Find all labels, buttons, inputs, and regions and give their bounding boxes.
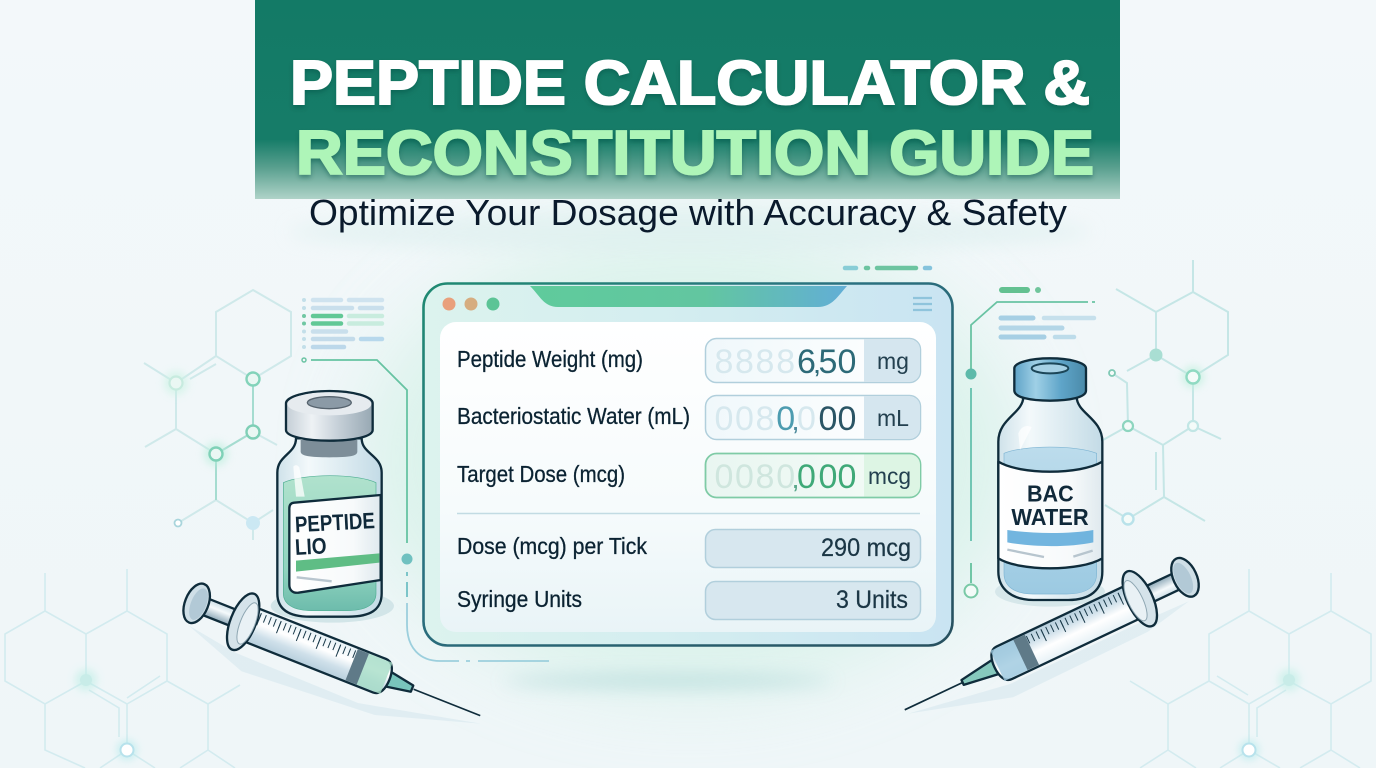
- row: bacteriostatic water: 0: [797, 400, 816, 438]
- row: target dose: [457, 454, 920, 498]
- row: target dose: ,: [793, 471, 798, 493]
- row: syringe units: Syringe Units: [457, 586, 582, 612]
- hexagon pattern: bottom right: [1130, 569, 1371, 768]
- vial shadow: [271, 589, 394, 623]
- bac water vial: [998, 358, 1102, 600]
- row: peptide weight: 650: [797, 343, 856, 381]
- vial shadow: [995, 577, 1105, 607]
- divider: [457, 512, 920, 514]
- row: bacteriostatic water: Bacteriostatic Water (mL): [457, 403, 690, 429]
- peptide vial: PEPTIDE: [294, 507, 375, 537]
- row: dose per tick: 290 mcg: [821, 534, 911, 562]
- row: peptide weight: [457, 338, 920, 382]
- row: bacteriostatic water: 0: [776, 400, 795, 438]
- bac water label: [998, 462, 1102, 568]
- bac water vial: BAC: [1027, 481, 1074, 507]
- title: RECONSTITUTION GUIDE: [296, 119, 1094, 188]
- row: dose per tick: Dose (mcg) per Tick: [457, 533, 647, 559]
- calculator top tab: [530, 286, 847, 307]
- peptide vial: LIO: [294, 532, 327, 560]
- data lines: top left of panel: [302, 298, 382, 349]
- row: peptide weight: ,: [814, 356, 820, 378]
- row: peptide weight: mg: [877, 348, 909, 374]
- row: target dose: 000: [797, 458, 856, 496]
- hexagon pattern: bottom left: [5, 569, 240, 768]
- header banner: [255, 0, 1120, 199]
- title: [290, 49, 1094, 188]
- peptide label: [289, 495, 381, 593]
- bac water vial and syringe: [892, 358, 1211, 741]
- window control dots: [442, 298, 500, 310]
- row: peptide weight: Peptide Weight (mg): [457, 346, 643, 372]
- bac water vial: WATER: [1011, 504, 1089, 530]
- title: PEPTIDE CALCULATOR &: [290, 49, 1090, 118]
- panel: calculator window: [424, 284, 952, 646]
- circuit line: left: [302, 358, 549, 661]
- row: peptide weight: 8888: [715, 343, 795, 381]
- molecule diagram: right: [1103, 260, 1228, 524]
- row: target dose: mcg: [868, 463, 911, 489]
- row: target dose: 0080: [715, 458, 795, 496]
- row: bacteriostatic water: mL: [877, 405, 909, 431]
- syringe: right: [892, 545, 1211, 741]
- row: bacteriostatic water: 008: [715, 400, 774, 438]
- row: target dose: Target Dose (mcg): [457, 461, 625, 487]
- row: bacteriostatic water: [457, 396, 920, 440]
- circuit line: right: [964, 302, 1095, 598]
- syringe: left: [169, 571, 494, 760]
- menu icon: [913, 298, 932, 310]
- molecule diagram: left: [144, 290, 291, 540]
- inner white card: [440, 322, 936, 632]
- row: bacteriostatic water: 00: [819, 400, 856, 438]
- shadow under calculator: [503, 675, 833, 687]
- data lines: top right of panel: [845, 268, 1094, 337]
- subtitle: Optimize Your Dosage with Accuracy & Safety: [309, 192, 1067, 233]
- row: syringe units: [457, 582, 920, 620]
- row: syringe units: 3 Units: [836, 586, 908, 614]
- peptide vial and syringe: [169, 391, 494, 760]
- row: dose per tick: [457, 530, 920, 568]
- peptide vial: [277, 391, 382, 617]
- row: bacteriostatic water: ,: [793, 413, 798, 435]
